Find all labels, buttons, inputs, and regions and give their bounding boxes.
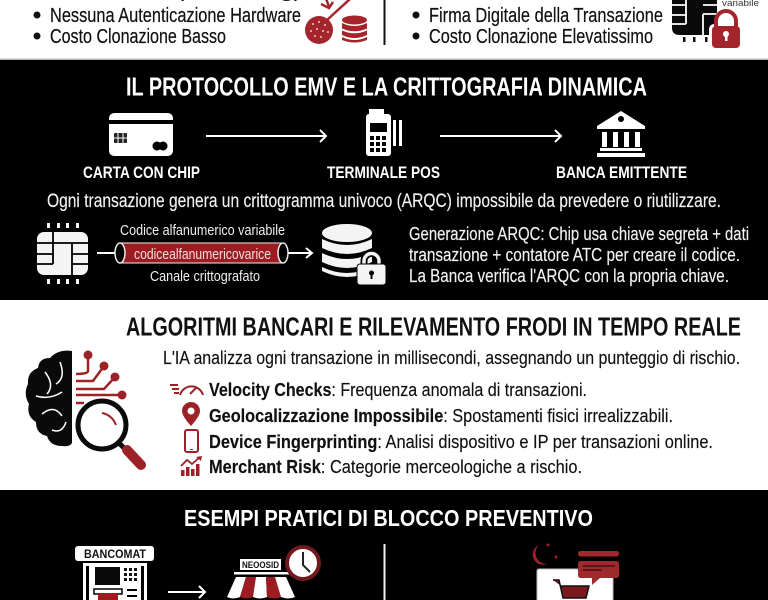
- label: encrypted channel: Canale crittografato: [150, 268, 260, 285]
- icon: smartphone: [185, 430, 198, 452]
- row: device fingerprinting: Device Fingerprinting: Analisi dispositivo e IP per transazioni online.: [209, 432, 713, 452]
- icon: database with lock: [322, 224, 386, 285]
- diagram: encrypted channel: [97, 243, 312, 263]
- text block: left list: Costo Clonazione Basso: [50, 26, 226, 48]
- text block: left list: [34, 0, 302, 48]
- icon: chip with lock: [672, 0, 759, 50]
- text block: right list: [412, 5, 663, 48]
- icon: shop and clock: [227, 547, 319, 598]
- row: geolocation: Geolocalizzazione Impossibile: Spostamenti fisici irrealizzabili.: [209, 406, 673, 426]
- panel: fraud detection: [0, 300, 768, 490]
- row: velocity checks: Velocity Checks: Frequenza anomala di transazioni.: [209, 380, 587, 400]
- icon: POS terminal: [366, 109, 402, 156]
- label: bank: BANCA EMITTENTE: [556, 163, 687, 182]
- icon: speedometer: [170, 385, 203, 395]
- label: card: CARTA CON CHIP: [83, 163, 200, 182]
- row: merchant risk: Merchant Risk: Categorie merceologiche a rischio.: [209, 457, 582, 477]
- heading: examples: ESEMPI PRATICI DI BLOCCO PREVENTIVO: [184, 505, 593, 531]
- panel: practical examples: [0, 490, 768, 600]
- text block: left list: Nessuna Autenticazione Hardware: [50, 5, 301, 27]
- panel: comparison top: [0, 0, 768, 60]
- icon: bank: [597, 111, 645, 157]
- text block: right list: Costo Clonazione Elevatissimo: [429, 26, 653, 48]
- icon: location pin: [182, 402, 200, 426]
- text block: right list: Firma Digitale della Transazione: [429, 5, 663, 27]
- icon: shop and clock: NEOOSID: [242, 560, 279, 570]
- diagram: encrypted channel: codicealfanumericovarice: [134, 246, 271, 263]
- icon: moon and stars: [533, 544, 558, 565]
- label: variable code: Codice alfanumerico variabile: [120, 222, 285, 239]
- text block: ARQC explanation: [409, 224, 749, 286]
- icon: chip card: [109, 113, 173, 156]
- icon: rising chart: [181, 456, 202, 476]
- arrow: terminal to bank: [440, 130, 561, 142]
- icon: brain and magnifier: [26, 350, 141, 465]
- label: terminal: TERMINALE POS: [327, 163, 440, 182]
- panel: EMV protocol: [0, 60, 768, 300]
- icon: payment card bubble: [578, 551, 619, 585]
- icon: chip: [37, 223, 88, 284]
- icon: ATM: BANCOMAT: [84, 547, 147, 561]
- arrow: card to terminal: [206, 130, 326, 142]
- icon: laptop with cart: [537, 569, 613, 600]
- icon: skimmer and database: [305, 0, 367, 44]
- icon: ATM: [75, 546, 154, 600]
- arrow: ATM to shop: [168, 586, 205, 598]
